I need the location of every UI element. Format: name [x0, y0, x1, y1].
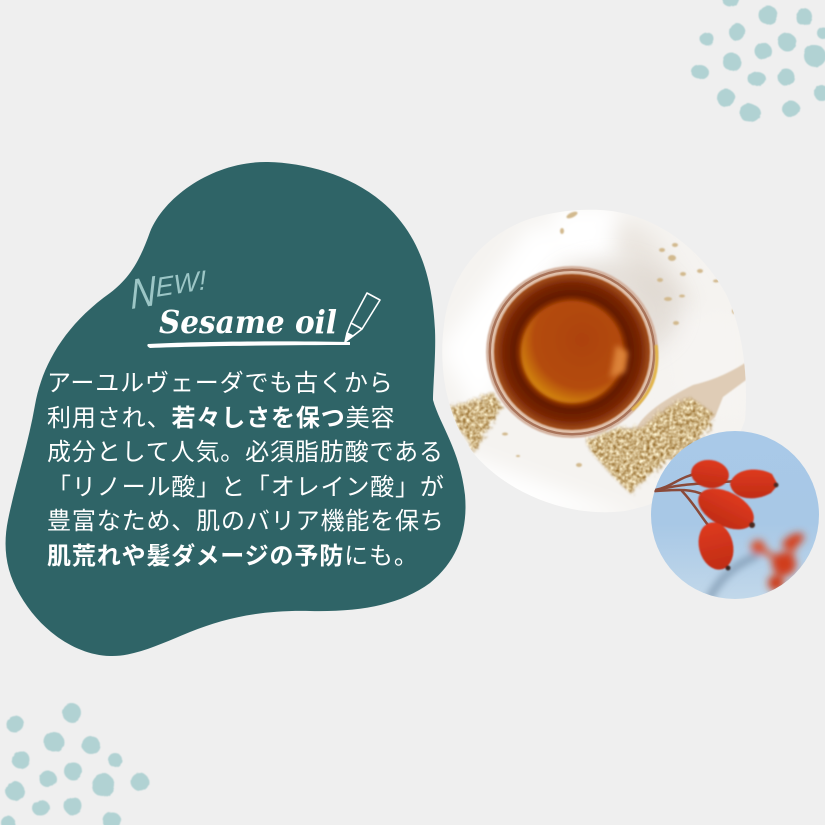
underline stroke — [147, 341, 350, 348]
rose hip photo circle — [650, 430, 820, 600]
body text: 「リノール酸」と「オレイン酸」が — [47, 474, 445, 501]
new label: EW! — [155, 264, 207, 303]
dots: top right decoration — [692, 0, 825, 122]
new label: N — [129, 267, 158, 318]
stems — [655, 473, 735, 525]
oil photo circle — [442, 210, 746, 512]
wooden scoop — [636, 363, 746, 430]
oil glass — [486, 266, 658, 438]
body text: 肌荒れや髪ダメージの予防にも。 — [47, 543, 419, 570]
icon: marker pen — [345, 293, 380, 342]
body text: アーユルヴェーダでも古くから — [47, 370, 394, 397]
seeds left pile — [450, 392, 502, 453]
body text: 豊富なため、肌のバリア機能を保ち — [47, 508, 445, 535]
title: Sesame oil — [159, 303, 337, 341]
blurred background branch — [708, 530, 806, 600]
body text: 成分として人気。必須脂肪酸である — [47, 439, 444, 466]
scattered seeds — [502, 210, 736, 467]
dots: bottom left decoration — [1, 704, 149, 825]
seeds bottom pile and scoop bowl — [587, 397, 713, 493]
teal blob panel — [6, 162, 466, 656]
hips — [689, 457, 778, 573]
body text: 利用され、若々しさを保つ美容 — [47, 405, 395, 432]
cloth folds — [446, 210, 684, 511]
glass shadow — [571, 256, 682, 349]
body text — [47, 370, 445, 570]
